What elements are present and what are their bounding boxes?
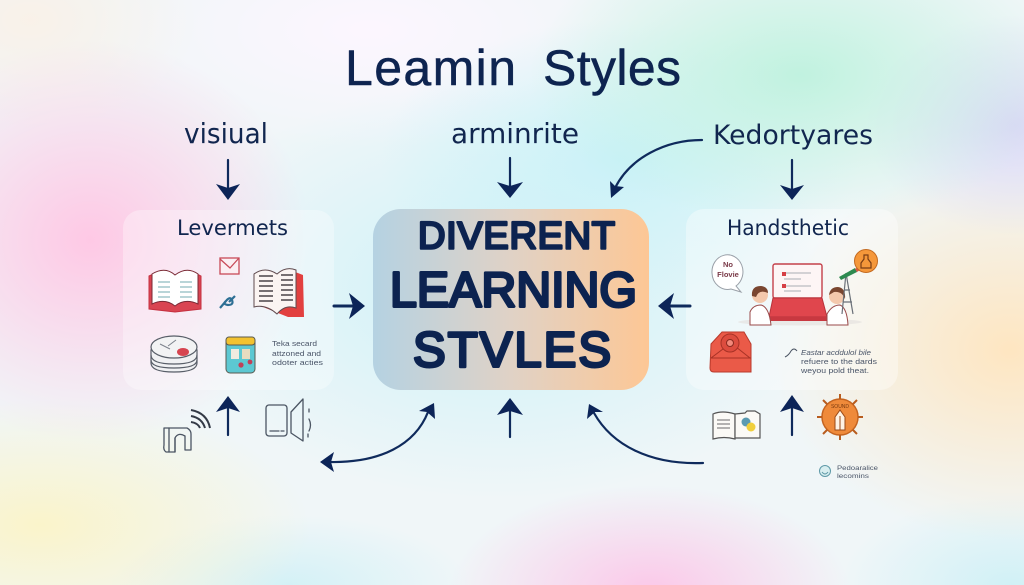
title: Leamin [345, 40, 516, 96]
caption: left panel: odoter acties [272, 358, 323, 367]
arrow: left panel to center [334, 293, 365, 319]
caption: right panel: weyou pold theat. [800, 366, 869, 375]
icon: book with colour dots [713, 411, 760, 439]
title [345, 40, 681, 96]
caption: left panel [272, 339, 323, 367]
panel heading: Levermets: Levermets [177, 216, 288, 240]
icon: candy link [220, 296, 235, 308]
arrow: auditory down [497, 158, 523, 198]
icon: orange sun badge: SOUND [831, 404, 849, 410]
caption: right panel: refuere to the dards [801, 357, 877, 366]
arrow: bottom right up [780, 395, 804, 435]
icon: person left [750, 286, 771, 325]
icon: open book left [149, 270, 201, 312]
caption: right panel: Eastar acddulol bile [801, 348, 871, 357]
caption: right panel [785, 348, 877, 375]
icon: envelope [220, 258, 239, 274]
panel: center [373, 209, 649, 390]
icon: speech bubble [712, 255, 743, 292]
panel: right kinesthetic [686, 209, 898, 390]
icon: laptop [738, 264, 862, 326]
arrow: curved bottom right [587, 404, 703, 463]
panel heading: Handsthetic: Handsthetic [727, 216, 849, 240]
arrow: bottom center up [497, 398, 523, 437]
icon: speech bubble: Flovie [717, 270, 739, 279]
icon: person right [827, 287, 848, 325]
heading: visiual: visiual [184, 117, 268, 150]
icon: open book right [254, 269, 304, 317]
panel: left visual [123, 210, 334, 390]
caption: left panel: Teka secard [272, 339, 317, 348]
icon: disc stack [151, 336, 197, 372]
icon: small round face with caption: lecomins [837, 473, 870, 480]
heading: Kedortyares: Kedortyares [713, 120, 873, 151]
arrow: visual down [216, 160, 240, 200]
center title line 3: STVLES [413, 324, 611, 378]
caption: left panel: attzoned and [272, 349, 321, 358]
icon: orange sun badge [817, 394, 863, 440]
icon: speech bubble: No [723, 260, 733, 269]
icon: wifi signal [191, 410, 210, 428]
center title line 2: LEARNING [390, 264, 637, 318]
arrow: curved double ended left [320, 403, 435, 472]
heading: arminrite: arminrite [451, 117, 579, 150]
icon: tablet and speaker [266, 399, 310, 441]
icon: jar with notes [226, 337, 255, 373]
icon: red box with webcam [710, 332, 751, 372]
arrow: bottom left up [216, 396, 240, 435]
icon: small round face with caption: Pedoaralice [837, 465, 878, 472]
arrow: curved to center from right heading [610, 140, 702, 198]
icon: doc device [164, 428, 191, 452]
icon: small round face with caption [820, 465, 878, 480]
title: Styles [543, 40, 681, 96]
icon: orange badge [854, 250, 878, 272]
icon: telescope on tripod [839, 265, 863, 314]
arrow: right panel to center [658, 293, 690, 319]
arrow: kinesthetic down [780, 160, 804, 200]
center title line 1: DIVERENT [418, 216, 615, 258]
